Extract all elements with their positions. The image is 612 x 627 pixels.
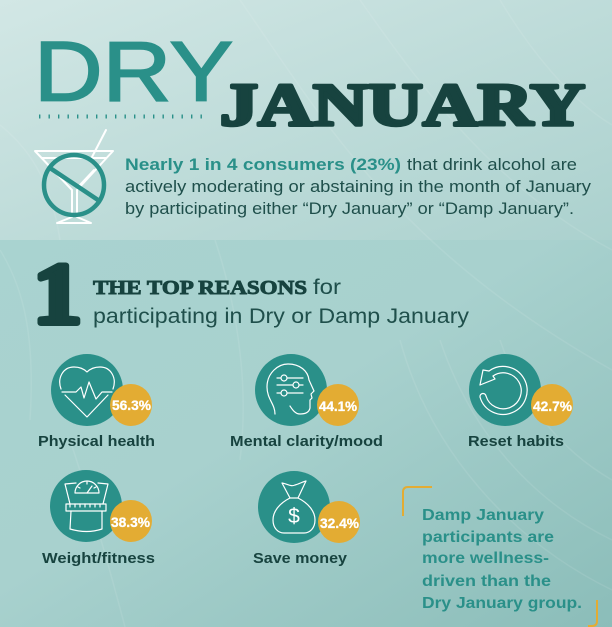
item: weight and fitness: Weight/fitness <box>42 550 155 567</box>
title: DRY: DRY <box>34 24 233 118</box>
intro text: that drink alcohol are <box>407 155 577 174</box>
callout: damp january note: driven than the <box>422 573 551 590</box>
callout: damp january note: Dry January group. <box>422 595 582 612</box>
icon: heart with pulse <box>60 367 114 417</box>
item: mental clarity: 44.1% <box>319 398 358 414</box>
section heading <box>93 276 470 328</box>
intro text <box>125 155 592 218</box>
item: weight and fitness <box>42 470 155 567</box>
section heading: for <box>313 276 341 299</box>
icon: head with sliders <box>267 364 314 414</box>
icon: crossed-out cocktail glass <box>35 130 113 223</box>
item: reset habits: Reset habits <box>468 433 564 450</box>
section heading: participating in Dry or Damp January <box>93 305 470 328</box>
item: save money: Save money <box>253 550 348 567</box>
icon: scale and measuring tape <box>65 481 108 532</box>
item: physical health: Physical health <box>38 433 155 450</box>
callout: damp january note: Damp January <box>422 507 544 524</box>
callout: damp january note <box>403 487 597 626</box>
title: dotted rule <box>39 114 210 118</box>
callout: damp january note: participants are <box>422 529 554 546</box>
big numeral 1: 1 <box>33 245 82 342</box>
item: save money <box>253 471 360 567</box>
icon: money bag <box>273 481 315 533</box>
callout: damp january note: more wellness- <box>422 550 549 567</box>
item: save money: 32.4% <box>320 515 360 531</box>
intro text: by participating either “Dry January” or “Damp January”. <box>125 199 574 218</box>
title: JANUARY: JANUARY <box>220 72 585 138</box>
item: mental clarity <box>230 354 383 450</box>
intro text: Nearly 1 in 4 consumers (23%) <box>125 155 401 174</box>
item: save money: $ <box>288 505 300 528</box>
intro text: actively moderating or abstaining in the month of January <box>125 177 592 196</box>
item: weight and fitness: 38.3% <box>111 514 151 530</box>
item: reset habits <box>468 354 573 450</box>
item: physical health <box>38 354 155 450</box>
item: mental clarity: Mental clarity/mood <box>230 433 383 450</box>
item: physical health: 56.3% <box>112 397 152 413</box>
icon: circular reset arrow <box>480 366 527 414</box>
item: reset habits: 42.7% <box>533 398 573 414</box>
section heading: THE TOP REASONS <box>93 277 307 299</box>
